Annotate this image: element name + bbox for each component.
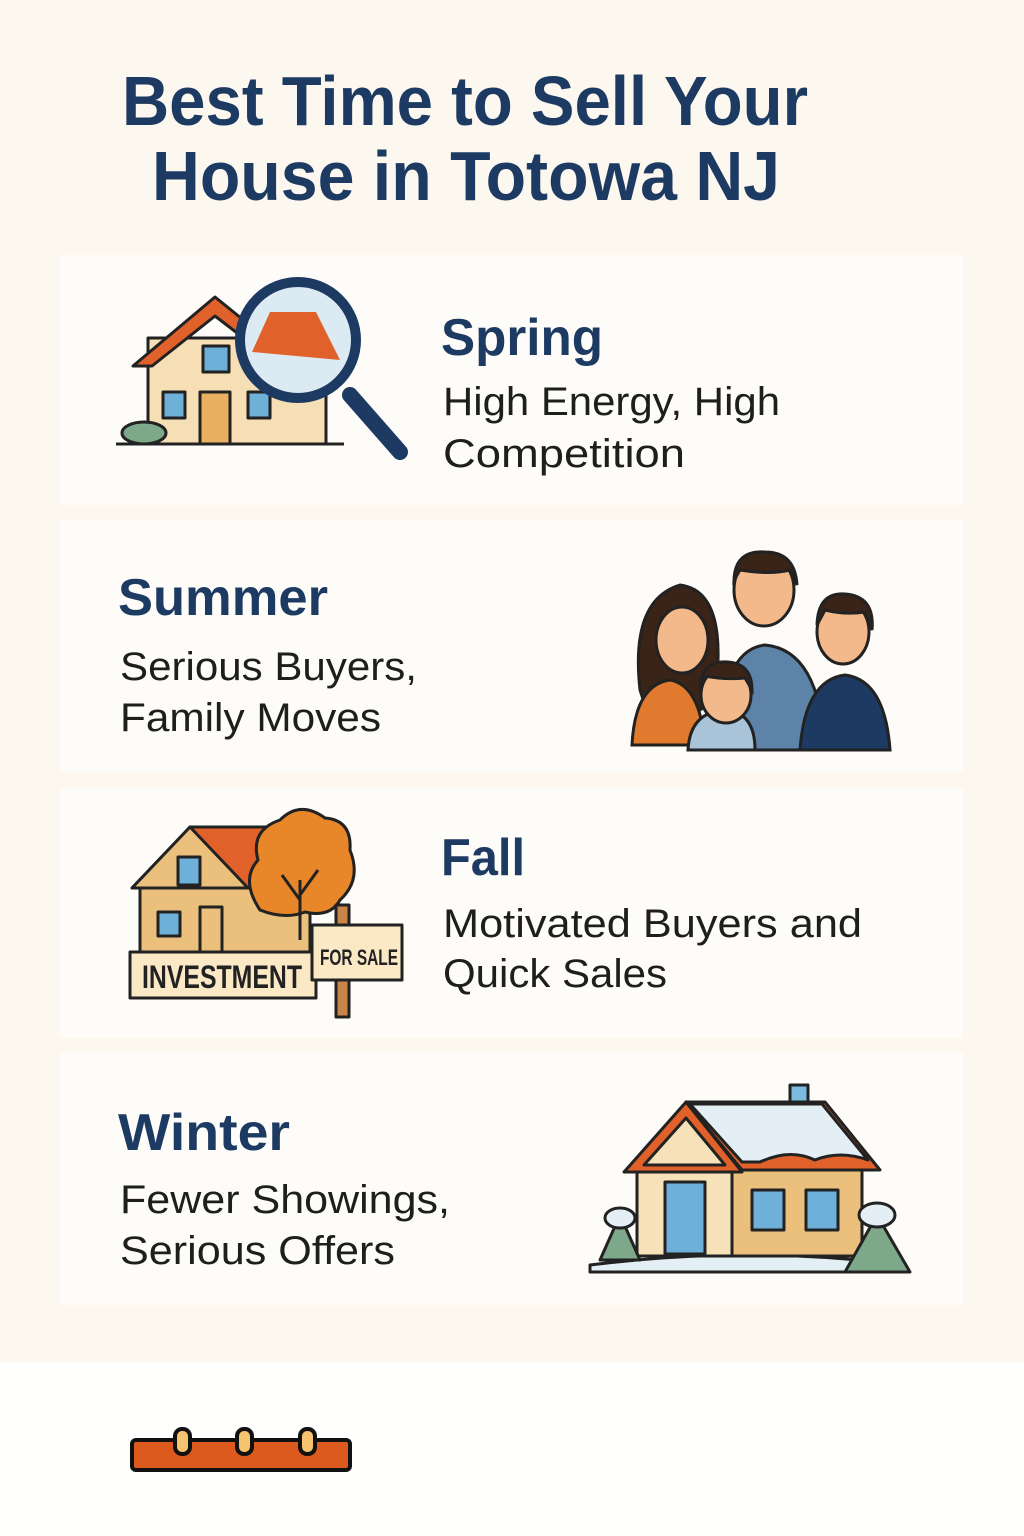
- icon: calendar bar: [132, 1429, 350, 1470]
- icon: house with tree and signs: FOR SALE: [320, 945, 398, 970]
- text: winter: Serious Offers: [120, 1229, 395, 1273]
- text: summer: Summer: [118, 569, 328, 627]
- panel: summer: [60, 520, 963, 772]
- text: summer: Serious Buyers,: [120, 645, 417, 689]
- text: spring: [441, 309, 780, 476]
- text: spring: Competition: [443, 432, 685, 476]
- text: winter: Winter: [118, 1104, 290, 1162]
- panel: spring: [60, 255, 963, 505]
- text: winter: [118, 1104, 450, 1273]
- icon: house with magnifier: [116, 282, 400, 452]
- title: [122, 62, 808, 215]
- text: fall: Fall: [441, 829, 525, 887]
- text: fall: Motivated Buyers and: [443, 902, 862, 946]
- text: fall: [441, 829, 862, 996]
- title: House in Totowa NJ: [152, 137, 780, 215]
- text: summer: [118, 569, 417, 740]
- text: winter: Fewer Showings,: [120, 1178, 450, 1222]
- icon: family: [632, 552, 890, 750]
- panel: winter: [60, 1053, 963, 1305]
- icon: snowy house: [590, 1085, 910, 1272]
- text: fall: Quick Sales: [443, 952, 667, 996]
- text: spring: Spring: [441, 309, 603, 367]
- panel: fall: [60, 788, 963, 1038]
- icon: house with tree and signs: INVESTMENT: [142, 959, 302, 995]
- icon: house with tree and signs: [130, 809, 402, 1017]
- text: summer: Family Moves: [120, 696, 381, 740]
- title: Best Time to Sell Your: [122, 62, 808, 140]
- text: spring: High Energy, High: [443, 380, 780, 424]
